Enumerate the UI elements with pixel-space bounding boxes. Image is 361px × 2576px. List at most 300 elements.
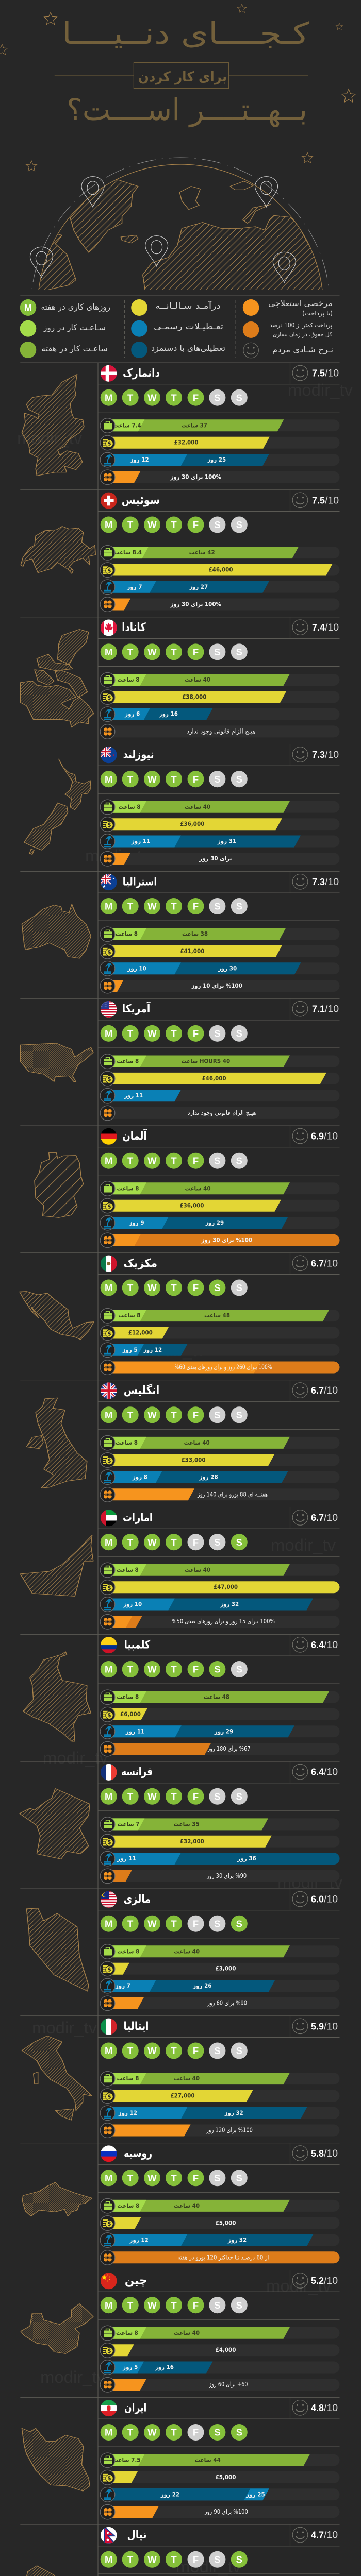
country name: روسیه <box>124 2147 152 2160</box>
work days: MTWTFSS <box>105 2554 242 2565</box>
bar: sick leave <box>109 1870 247 1882</box>
map: Italy <box>22 2036 92 2120</box>
bar: hours: 40 ساعت <box>185 803 210 810</box>
bar: income: £3,000 <box>216 1965 236 1972</box>
map: Malaysia <box>26 1908 89 1991</box>
bar: income: £4,000 <box>216 2346 236 2353</box>
bar: holidays: 11 روز <box>117 1855 136 1862</box>
map: UAE <box>20 1535 93 1596</box>
work days <box>101 516 248 533</box>
bar: holidays: 7 روز <box>126 583 142 591</box>
work days <box>101 771 248 787</box>
happiness score: 5.2/10 <box>311 2275 338 2286</box>
legend: hours per week <box>20 342 108 358</box>
flag: Italy <box>101 2019 117 2035</box>
happiness score <box>292 1891 338 1907</box>
flag: China <box>101 2273 117 2290</box>
work days: MTWTFSS <box>105 519 242 530</box>
happiness score: 7.1/10 <box>312 1004 339 1015</box>
watermarks: modir_tv <box>288 381 353 399</box>
work days: MTWTFSS <box>105 901 242 912</box>
work days: MTWTFSS <box>105 2045 242 2056</box>
bar: holidays: 12 روز <box>143 1346 162 1354</box>
panel: New Zealand <box>20 744 340 866</box>
bar: hours <box>109 2454 310 2466</box>
map: China <box>21 2304 93 2353</box>
panel: Switzerland <box>20 490 340 612</box>
bar: holidays: 5 روز <box>122 1346 138 1354</box>
map: USA <box>20 1043 93 1082</box>
work days: MTWTFSS <box>105 1664 242 1675</box>
bar: sick leave <box>106 1234 339 1246</box>
happiness score: 7.5/10 <box>312 495 339 506</box>
happiness score: 6.4/10 <box>311 1767 338 1778</box>
bar: holidays: 29 روز <box>214 1727 233 1735</box>
happiness score <box>292 620 339 635</box>
work days: MTWTFSS <box>105 1410 242 1420</box>
bar: holidays <box>109 962 301 974</box>
watermarks: modir_tv <box>32 2019 97 2037</box>
bar: sick leave <box>109 2125 253 2136</box>
work days: MTWTFSS <box>105 1028 242 1039</box>
bar: income <box>109 1708 147 1720</box>
panel: Nepal <box>20 2524 340 2576</box>
bar: holidays: 32 روز <box>227 2236 247 2244</box>
happiness score: 6.7/10 <box>311 1512 338 1523</box>
happiness score <box>292 2273 338 2288</box>
map: Germany <box>35 1153 84 1217</box>
bar: sick leave: %100 برای 90 روز <box>204 2507 248 2516</box>
row icons <box>100 545 115 612</box>
bar: holidays <box>109 1598 313 1611</box>
bar: sick leave: 100% برای 30 روز <box>170 473 222 481</box>
bar: holidays <box>109 836 301 847</box>
legend: public holidays: تعـطیـلات رسمـی <box>154 321 223 332</box>
country name: نپال <box>127 2529 146 2541</box>
row icons: $ <box>107 1457 111 1464</box>
bar: income <box>109 818 282 830</box>
legend: annual income <box>131 299 221 316</box>
bar: hours <box>109 1945 290 1957</box>
country name: کانادا <box>122 621 146 634</box>
bar: holidays: 27 روز <box>189 583 208 591</box>
work days: MTWTFSS <box>105 2173 242 2183</box>
bar: income <box>109 2090 253 2102</box>
bar: sick leave: %90 برای 30 روز <box>206 1872 247 1880</box>
bar: holidays: 22 روز <box>160 2490 179 2498</box>
legend: hours per week: ساعـت کار در هفته <box>41 344 108 354</box>
bar: hours: 40 ساعت <box>174 2202 200 2209</box>
bar: hours: 38 ساعت <box>182 930 208 938</box>
bar: holidays: 5 روز <box>122 2364 138 2371</box>
happiness score: 7.3/10 <box>312 876 339 888</box>
flag: Denmark <box>101 365 117 382</box>
work days: MTWTFSS <box>105 1155 242 1166</box>
panel: Malaysia <box>20 1889 340 2011</box>
bar: hours <box>109 1818 268 1830</box>
bar: income <box>109 945 282 957</box>
bar: holidays <box>109 1090 181 1101</box>
happiness score <box>292 493 339 508</box>
happiness score: 5.8/10 <box>311 2148 338 2159</box>
panel: USA <box>20 998 340 1121</box>
bar: income: £12,000 <box>128 1329 153 1336</box>
bar: hours <box>109 1182 290 1194</box>
bar: holidays: 11 روز <box>131 838 150 845</box>
bar: hours: 35 ساعت <box>174 1820 200 1827</box>
bar: income <box>109 2471 236 2483</box>
bar: income: £38,000 <box>182 693 206 700</box>
country name: کلمبیا <box>124 1638 150 1651</box>
happiness score <box>292 1383 338 1398</box>
row icons <box>100 2198 115 2265</box>
panel: Canada <box>20 617 340 739</box>
bar: income <box>109 1327 169 1338</box>
bar: hours: 40 ساعت <box>185 1184 211 1192</box>
bar: holidays: 12 روز <box>129 456 149 464</box>
work days: MTWTFSS <box>105 2427 242 2438</box>
bar: income <box>109 1073 326 1084</box>
row icons <box>100 418 115 485</box>
bar: holidays <box>109 1217 288 1229</box>
bar: holidays: 9 روز <box>128 1219 144 1227</box>
bar: hours <box>109 801 290 813</box>
row icons: $ <box>107 1202 111 1210</box>
bar: hours: 8 ساعت <box>117 1057 139 1064</box>
bar: hours: 8 ساعت <box>117 1184 139 1192</box>
bar: hours: 42 ساعت <box>189 549 215 556</box>
bar: hours: 8 ساعت <box>117 2075 139 2082</box>
legend: paid sick leave: مرخصی استعلاجی <box>268 298 333 309</box>
happiness score <box>292 874 339 889</box>
bar: hours: 8 ساعت <box>116 930 138 938</box>
row icons <box>100 1563 115 1629</box>
bar: holidays: 29 روز <box>205 1219 224 1227</box>
happiness score <box>292 1128 338 1144</box>
bar: hours: 8 ساعت <box>116 1439 138 1446</box>
row icons <box>100 1690 115 1756</box>
happiness score <box>292 1001 339 1016</box>
bar: sick leave <box>109 599 222 610</box>
bar: sick leave: هیـچ الزام قانونی وجود ندارد <box>188 1109 256 1117</box>
map: Mexico <box>20 1292 94 1340</box>
country name: امارات <box>123 1512 153 1524</box>
bar: income: £5,000 <box>216 2219 236 2226</box>
country name: انگلیس <box>124 1383 159 1397</box>
flag: New Zealand <box>101 747 117 764</box>
work days: MTWTFSS <box>105 1282 242 1293</box>
panel: UK <box>20 1380 340 1502</box>
panel: China <box>20 2270 340 2392</box>
bar: holidays: 6 روز <box>124 710 140 718</box>
bar: sick leave: 100% بـرای 15 روز و برای روزهای بعدی 50% <box>172 1617 275 1625</box>
row icons: $ <box>107 1330 111 1337</box>
bar: holidays <box>109 581 269 593</box>
happiness score <box>292 365 339 381</box>
bar: holidays: 11 روز <box>124 1092 143 1099</box>
bar: holidays: 12 روز <box>129 2236 149 2244</box>
bar: sick leave <box>106 2251 339 2263</box>
row icons: $ <box>107 1076 111 1083</box>
row icons <box>100 800 115 866</box>
bar: income: £47,000 <box>214 1583 238 1590</box>
bar: hours <box>109 2327 290 2339</box>
happiness score: 7.4/10 <box>312 622 339 633</box>
map: Colombia <box>23 1652 91 1741</box>
happiness score <box>292 2146 338 2161</box>
happiness score: 4.8/10 <box>311 2402 338 2414</box>
row icons: $ <box>107 2220 111 2227</box>
bar: holidays <box>109 1344 187 1356</box>
work days <box>101 1916 248 1932</box>
happiness score <box>292 1764 338 1780</box>
row icons: $ <box>107 2475 111 2482</box>
bar: holidays <box>109 2107 307 2119</box>
section divider <box>97 363 99 2576</box>
bar: income <box>109 2217 236 2229</box>
bar: hours: 40 ساعت <box>184 1439 210 1446</box>
bar: hours <box>109 928 286 940</box>
bar: holidays <box>109 2488 269 2500</box>
bar: sick leave <box>109 1743 251 1755</box>
map: Switzerland <box>21 527 95 573</box>
flag: Germany <box>101 1128 117 1145</box>
work days <box>101 1280 248 1296</box>
work days <box>101 1661 248 1677</box>
flag: Malaysia <box>101 1891 117 1908</box>
country name: استرالیا <box>123 875 157 888</box>
flag: USA <box>101 1001 117 1018</box>
bar: income <box>109 564 333 576</box>
row icons <box>100 2071 115 2138</box>
row icons: $ <box>107 567 111 574</box>
bar: income <box>109 1836 272 1848</box>
legend: annual income: درآمـد سـالـانــه <box>155 301 221 311</box>
bar: income: £46,000 <box>202 1075 226 1082</box>
work days: MTWTFSS <box>105 1918 242 1929</box>
bar: holidays: 16 روز <box>159 710 178 718</box>
title line 2: بــهــتــــر اســــت؟ <box>67 92 307 128</box>
country name: سوئیس <box>122 494 160 507</box>
bar: hours: 8 ساعت <box>119 1312 140 1319</box>
work days <box>101 1153 248 1169</box>
happiness score: 6.0/10 <box>311 1894 338 1905</box>
bar: hours: 40 ساعت <box>185 676 210 683</box>
work days: MTWTFSS <box>105 774 242 785</box>
map: Denmark <box>22 375 84 476</box>
title line 1: کـجــــای دنــیــــا <box>62 16 309 51</box>
bar: sick leave: 100% برای 30 روز <box>170 600 222 608</box>
bar: hours <box>109 419 284 431</box>
watermarks: modir_tv <box>40 2368 105 2386</box>
bar: sick leave: %100 برای 10 روز <box>191 982 242 990</box>
row icons: $ <box>107 440 111 447</box>
bar: hours: 8.4 ساعت <box>114 549 142 556</box>
watermarks: modir_tv <box>85 846 150 865</box>
legend: happiness rate: نـرخ شـادی مردم <box>272 345 333 355</box>
panel: Australia <box>20 871 340 993</box>
bar: hours: 7.4 ساعت <box>113 421 141 429</box>
map: Canada <box>20 630 94 727</box>
row icons: $ <box>107 1966 111 1973</box>
flag: Australia <box>101 874 117 890</box>
bar: sick leave: %100 برای 120 روز <box>206 2126 253 2134</box>
legend: public holidays <box>131 320 223 337</box>
bar: hours: 40 ساعت <box>174 2329 200 2336</box>
bar: sick leave <box>109 1616 275 1628</box>
bar: holidays <box>109 2362 212 2373</box>
flag: Russia <box>101 2145 117 2162</box>
happiness score <box>292 747 339 762</box>
watermarks: modir_tv <box>277 1873 342 1892</box>
bar: holidays <box>109 1725 294 1737</box>
bar: hours <box>109 1055 290 1067</box>
work days <box>101 1788 248 1805</box>
bar: hours: 37 ساعت <box>182 421 207 429</box>
bar: holidays <box>106 1853 339 1865</box>
country name: چین <box>125 2274 147 2287</box>
bar: sick leave: هیـچ الزام قانونی وجود ندارد <box>187 727 255 735</box>
legend: partial sick pay: کل حقوق، در زمان بیماری <box>273 331 332 338</box>
watermarks: modir_tv <box>176 2557 241 2576</box>
map: Russia <box>22 2182 92 2216</box>
happiness score <box>292 2019 338 2034</box>
happiness score <box>292 1510 338 1525</box>
flag: Mexico <box>101 1255 117 1272</box>
watermarks: modir_tv <box>271 1536 336 1554</box>
bar: holidays: 11 روز <box>125 1727 144 1735</box>
row icons <box>100 1181 115 1248</box>
bar: holidays: 8 روز <box>132 1473 147 1481</box>
bar: holidays <box>109 454 269 466</box>
watermarks: modir_tv <box>17 429 82 448</box>
bar: holidays: 10 روز <box>123 1600 142 1608</box>
flag: Nepal <box>101 2527 117 2544</box>
happiness score <box>292 2400 338 2415</box>
bar: income: £41,000 <box>180 947 204 955</box>
country name: ایران <box>124 2401 146 2414</box>
country name: ایتالیا <box>124 2020 149 2033</box>
bar: sick leave <box>109 2379 248 2391</box>
row icons: $ <box>107 821 111 828</box>
map: New Zealand <box>24 759 91 854</box>
panel: France <box>20 1761 340 1884</box>
row icons <box>100 927 115 993</box>
row icons: $ <box>107 948 111 956</box>
bar: hours <box>109 2073 290 2084</box>
flag: UAE <box>101 1510 117 1526</box>
bar: hours: 8 ساعت <box>117 1693 139 1701</box>
bar: hours <box>109 2200 290 2212</box>
panel: UAE <box>20 1507 340 1629</box>
bar: hours: 8 ساعت <box>119 803 140 810</box>
watermarks: modir_tv <box>140 1341 205 1360</box>
work days <box>101 2170 248 2186</box>
decorative stars <box>0 4 355 171</box>
bar: hours <box>109 547 299 558</box>
work days <box>101 1406 248 1423</box>
map: France <box>20 1789 90 1859</box>
bar: holidays: 10 روز <box>127 964 146 972</box>
map: UK <box>26 1398 87 1488</box>
bar: holidays: 31 روز <box>217 838 236 845</box>
work days: MTWTFSS <box>105 392 242 403</box>
bar: holidays: 16 روز <box>155 2364 174 2371</box>
legend: paid sick leave: (با پرداخت) <box>302 310 333 317</box>
country name: مالزی <box>124 1893 151 1906</box>
legend: working days per week: M <box>24 302 32 313</box>
work days <box>101 2551 248 2568</box>
flag: Switzerland <box>101 493 117 509</box>
legend: partial sick pay: پرداخت کمتر از 100 درصد <box>270 321 332 329</box>
happiness score <box>292 1256 338 1271</box>
bar: sick leave: %90 برای 60 روز <box>207 1999 247 2007</box>
happiness score: 6.7/10 <box>311 1385 338 1396</box>
work days: MTWTFSS <box>105 647 242 657</box>
bar: holidays <box>109 1980 275 1992</box>
happiness score: 5.9/10 <box>311 2021 338 2032</box>
bar: income: £5,000 <box>216 2473 236 2481</box>
panel: Denmark <box>20 363 340 485</box>
work days <box>101 643 248 660</box>
row icons <box>100 2453 115 2519</box>
bar: holidays <box>109 708 212 720</box>
map: Australia <box>22 904 91 958</box>
bar: hours <box>109 1564 290 1576</box>
bar: sick leave: %67 برای 180 روز <box>207 1744 251 1753</box>
bar: holidays <box>109 2234 314 2246</box>
flag: Colombia <box>101 1637 117 1654</box>
bar: hours <box>109 1437 290 1449</box>
world map globe <box>30 158 329 290</box>
work days: MTWTFSS <box>105 1791 242 1802</box>
legend <box>20 295 339 358</box>
work days: MTWTFSS <box>105 2300 242 2311</box>
country name: نیوزلند <box>123 748 154 761</box>
legend: hours per day: سـاعـت کار در روز <box>43 323 106 333</box>
bar: sick leave <box>109 2506 248 2518</box>
bar: hours: 8 ساعت <box>117 1566 139 1573</box>
bar: holidays: 30 روز <box>218 964 237 972</box>
work days <box>101 2042 248 2059</box>
happiness score <box>292 1637 338 1652</box>
row icons <box>100 1944 115 2011</box>
bar: income: £36,000 <box>179 1202 204 1209</box>
bar: sick leave: برای 30 روز <box>199 855 232 862</box>
bar: income: £32,000 <box>174 439 199 446</box>
legend: happiness rate <box>243 343 333 358</box>
panel: Mexico <box>20 1253 340 1375</box>
panel: Colombia <box>20 1634 340 1756</box>
bar: sick leave <box>109 1997 247 2009</box>
bar: income: £36,000 <box>180 820 204 827</box>
legend: paid vacation <box>131 342 225 358</box>
subtitle box: برای کار کردن <box>138 69 227 85</box>
flag: Canada <box>101 619 117 636</box>
bar: hours: 48 ساعت <box>204 1312 230 1319</box>
country name: آمریکا <box>122 1001 151 1015</box>
bar: income: £46,000 <box>208 566 233 573</box>
watermarks <box>17 381 355 2576</box>
row icons <box>100 1309 115 1375</box>
bar: sick leave: %100 برای 30 روز <box>201 1236 252 1244</box>
flag: France <box>101 1764 117 1781</box>
happiness score: 7.5/10 <box>312 368 339 379</box>
row icons: $ <box>107 1839 111 1846</box>
bar: holidays: 25 روز <box>245 2490 265 2498</box>
bar: income <box>109 691 286 703</box>
bar: holidays: 32 روز <box>224 2109 243 2117</box>
